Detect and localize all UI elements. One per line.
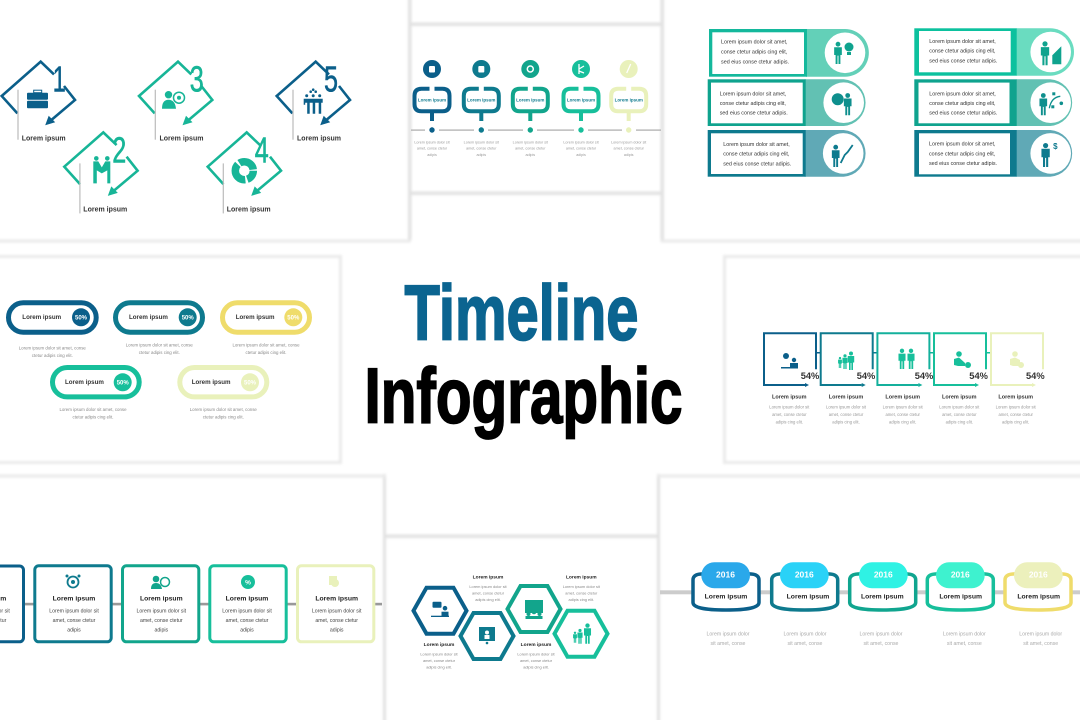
card left 2: conse ctetur adipis cing elit,	[720, 101, 786, 107]
year item 3: Lorem ipsum dolor	[860, 632, 903, 638]
timeline step 3: Lorem ipsum	[516, 98, 544, 102]
step 2: 54%	[857, 371, 876, 381]
hexagon text top right: Lorem ipsum dolor sit	[563, 584, 601, 589]
card 2: amet, conse ctetur	[53, 618, 96, 624]
step 5: amet, conse ctetur	[998, 412, 1034, 417]
title line: Timeline: Timeline	[404, 268, 638, 356]
pill 2: 50%	[182, 316, 194, 322]
panel: numbered diamonds	[2, 59, 350, 213]
icon: person with bulb	[834, 42, 854, 64]
icon: group of people	[304, 88, 323, 114]
timeline step 2: amet, conse ctetur	[466, 146, 497, 150]
year item 5: Lorem ipsum dolor	[1019, 632, 1062, 638]
pill 4	[52, 368, 139, 419]
card 3	[122, 566, 199, 642]
card left 3: conse ctetur adipis cing elit,	[723, 152, 790, 158]
pill 1: 50%	[75, 316, 88, 322]
timeline step 4: Lorem ipsum dolor sit	[563, 140, 599, 144]
hexagon text bottom left: adipis cing elit.	[426, 664, 452, 670]
pill 4: 50%	[117, 380, 129, 386]
card 1	[0, 566, 24, 642]
diamond item 4: Lorem ipsum	[227, 206, 271, 213]
diamond item 3: Lorem ipsum	[160, 136, 203, 143]
pill 1: Lorem ipsum	[22, 314, 62, 321]
icon: speaker at desk	[431, 602, 449, 617]
pill 4: Lorem ipsum	[65, 379, 104, 386]
card left 2: Lorem ipsum dolor sit amet,	[720, 91, 787, 97]
icon: two people	[898, 349, 915, 369]
diamond item 4	[208, 129, 281, 213]
icon: pale document	[329, 576, 339, 587]
icon: person with arrow up	[1041, 41, 1061, 65]
pill 2	[116, 303, 202, 355]
timeline step 3: Lorem ipsum dolor sit	[513, 140, 548, 144]
card left 3	[708, 130, 866, 177]
card right 1: conse ctetur adipis cing elit,	[929, 49, 996, 55]
hexagon text bottom left: Lorem ipsum dolor sit	[420, 651, 459, 656]
pill 3: Lorem ipsum	[236, 314, 275, 321]
card 5: Lorem ipsum	[315, 596, 358, 603]
pill 1: Lorem ipsum dolor sit amet, conse	[19, 346, 86, 350]
hexagon text top right: Lorem ipsum	[566, 574, 597, 580]
timeline step 4: Lorem ipsum	[567, 98, 595, 102]
icon: person with target	[151, 576, 170, 589]
card 3: Lorem ipsum	[140, 596, 183, 603]
year item 4: 2016	[951, 570, 970, 580]
panel: year timeline	[660, 562, 1080, 647]
hexagon text top left	[469, 574, 508, 602]
pill 2: Lorem ipsum	[129, 314, 168, 321]
pill 5: Lorem ipsum	[192, 379, 231, 386]
pill 3: 50%	[287, 316, 300, 322]
timeline step 2: Lorem ipsum	[467, 98, 495, 102]
card left 1: sed eius conse ctetur adipis.	[721, 59, 789, 65]
step 4	[934, 333, 991, 425]
year item 5: Lorem ipsum	[1017, 593, 1060, 600]
card 3: Lorem ipsum dolor sit	[137, 609, 187, 615]
card right 3: conse ctetur adipis cing elit,	[929, 151, 996, 157]
hexagon text bottom left: amet, conse ctetur	[423, 658, 456, 663]
hexagon text top right: adipis cing elit.	[569, 597, 594, 602]
panel: rounded card timeline	[0, 566, 382, 642]
diamond item 3	[139, 59, 212, 143]
timeline step 1: adipis	[427, 153, 437, 157]
step 4: Lorem ipsum dolor sit	[939, 404, 980, 410]
timeline step 5: amet, conse ctetur	[614, 146, 645, 150]
icon: person with rising arrow	[832, 145, 853, 167]
year item 4: Lorem ipsum dolor	[943, 632, 986, 638]
hexagon text top right: amet, conse ctetur	[565, 590, 598, 595]
timeline step 3: amet, conse ctetur	[515, 146, 546, 150]
year item 1: Lorem ipsum dolor	[707, 632, 750, 638]
card left 1: Lorem ipsum dolor sit amet,	[721, 40, 788, 46]
year item 5	[1005, 562, 1071, 647]
diamond item 2	[64, 129, 138, 213]
diamond item 5	[277, 59, 350, 143]
card right 1	[914, 28, 1074, 76]
timeline step 3	[513, 60, 548, 157]
timeline step 2: adipis	[476, 153, 486, 157]
diamond item 2: Lorem ipsum	[83, 206, 127, 213]
step 3: adipis cing elit.	[889, 420, 916, 425]
step 4: 54%	[969, 371, 989, 381]
card 5: amet, conse ctetur	[315, 618, 358, 624]
icon: idea presenter	[781, 353, 798, 368]
timeline step 4	[563, 60, 599, 157]
card right 2: conse ctetur adipis cing elit,	[929, 101, 996, 107]
card right 3	[914, 130, 1072, 177]
card 2: Lorem ipsum	[53, 596, 95, 603]
timeline step 1	[414, 60, 450, 157]
hexagon 4	[554, 611, 608, 657]
hexagon text bottom right	[517, 642, 556, 670]
year item 2: Lorem ipsum dolor	[784, 632, 827, 638]
card left 3: Lorem ipsum dolor sit amet,	[723, 142, 790, 148]
icon: person with strategy	[1039, 92, 1063, 115]
step 1: Lorem ipsum dolor sit	[769, 404, 810, 410]
hexagon text bottom left	[420, 642, 459, 670]
pill 3	[222, 303, 310, 355]
pill 2: ctetur adipis cing elit.	[139, 350, 180, 355]
pill 2: Lorem ipsum dolor sit amet, conse	[126, 342, 193, 348]
pill 5: Lorem ipsum dolor sit amet, conse	[190, 407, 257, 412]
step 2: amet, conse ctetur	[829, 412, 864, 417]
title line: Infographic: Infographic	[364, 352, 682, 440]
timeline step 1: Lorem ipsum	[418, 98, 446, 102]
hexagon text top left: Lorem ipsum dolor sit	[469, 584, 508, 589]
step 4: amet, conse ctetur	[942, 412, 977, 417]
timeline step 2: Lorem ipsum dolor sit	[464, 140, 499, 144]
step 5: 54%	[1026, 371, 1045, 381]
card 5	[298, 566, 374, 642]
title	[364, 268, 682, 440]
year item 4: sit amet, conse	[947, 641, 982, 647]
step 5: Lorem ipsum dolor sit	[996, 404, 1037, 410]
timeline step 5: Lorem ipsum dolor sit	[611, 140, 646, 144]
year item 2: sit amet, conse	[788, 641, 823, 647]
card right 1: Lorem ipsum dolor sit amet,	[929, 39, 996, 45]
card right 2: sed eius conse ctetur adipis.	[929, 111, 997, 117]
icon: rising people	[838, 352, 854, 370]
step 2: Lorem ipsum dolor sit	[826, 404, 867, 410]
card 2: adipis	[67, 627, 81, 633]
timeline step 5	[611, 60, 646, 157]
year item 3: sit amet, conse	[864, 641, 899, 647]
year item 3	[850, 562, 916, 647]
pill 5	[180, 368, 267, 419]
hexagon text bottom right: adipis cing elit.	[523, 664, 549, 670]
card left 1	[709, 29, 869, 77]
panel: text cards with icon circles	[708, 28, 1074, 177]
card 2: Lorem ipsum dolor sit	[49, 609, 99, 615]
step 5	[991, 333, 1045, 425]
timeline step 5: Lorem ipsum	[615, 98, 643, 102]
card 4: Lorem ipsum	[226, 596, 268, 603]
step 5: Lorem ipsum	[998, 394, 1033, 400]
timeline step 1: amet, conse ctetur	[417, 146, 448, 150]
pill 3: ctetur adipis cing elit.	[246, 350, 286, 355]
step 5: adipis cing elit.	[1002, 420, 1029, 425]
year item 1: 2016	[716, 570, 735, 580]
year item 2	[772, 562, 838, 647]
diamond item 5: Lorem ipsum	[297, 136, 341, 143]
step 1	[764, 333, 821, 425]
icon: target person	[162, 91, 184, 109]
panel: connector timeline	[411, 60, 661, 157]
step 3	[877, 333, 934, 425]
card left 1: conse ctetur adipis cing elit,	[721, 49, 788, 55]
diamond item 1: 1	[53, 59, 66, 100]
timeline step 3: adipis	[525, 153, 535, 157]
card right 3: Lorem ipsum dolor sit amet,	[929, 142, 996, 148]
pill 5: 50%	[244, 380, 257, 386]
icon: briefcase	[27, 90, 48, 108]
card 4: amet, conse ctetur	[226, 618, 269, 624]
year item 1: sit amet, conse	[711, 641, 746, 647]
icon: rising people	[573, 623, 591, 644]
pill 4: ctetur adipis cing elit.	[72, 414, 114, 419]
step 3: Lorem ipsum dolor sit	[883, 404, 924, 410]
pill 1	[8, 303, 96, 358]
card right 3: sed eius conse ctetur adipis.	[929, 161, 997, 167]
year item 3: Lorem ipsum	[861, 593, 904, 600]
pill 4: Lorem ipsum dolor sit amet, conse	[59, 407, 127, 412]
diamond item 3: 3	[190, 59, 204, 100]
step 4: adipis cing elit.	[946, 420, 973, 425]
hexagon text top left: amet, conse ctetur	[472, 590, 505, 595]
card left 3: sed eius conse ctetur adipis.	[723, 161, 791, 167]
year item 5: sit amet, conse	[1023, 641, 1058, 647]
icon: presentation board	[479, 627, 495, 644]
card right 2	[914, 79, 1072, 126]
timeline step 5: adipis	[624, 153, 634, 157]
diamond item 1: Lorem ipsum	[22, 136, 66, 143]
diamond item 2: 2	[112, 129, 126, 170]
timeline step 4: amet, conse ctetur	[566, 146, 597, 150]
hexagon text bottom right: Lorem ipsum dolor sit	[517, 651, 556, 656]
diamond item 4: 4	[255, 129, 269, 170]
diamond item 1	[2, 59, 75, 143]
card right 2: Lorem ipsum dolor sit amet,	[929, 91, 996, 97]
icon: percent bubble: %	[245, 580, 251, 586]
step 3: amet, conse ctetur	[885, 412, 921, 417]
step 4: Lorem ipsum	[942, 394, 977, 400]
step 1: adipis cing elit.	[776, 420, 803, 425]
pill 5: ctetur adipis cing elit.	[203, 414, 244, 419]
panel: percentage pills	[8, 303, 310, 419]
icon: person with puzzle	[954, 351, 971, 368]
timeline step 1: Lorem ipsum dolor sit	[414, 140, 450, 144]
hexagon text bottom left: Lorem ipsum	[424, 642, 455, 648]
hexagon 1	[414, 588, 466, 634]
icon: person with pie	[832, 93, 852, 115]
icon: class board	[525, 600, 543, 619]
card 4: adipis	[240, 627, 254, 633]
card 5: adipis	[330, 627, 344, 633]
icon: person with coin	[1010, 351, 1024, 368]
icon: alarm person	[66, 574, 80, 588]
timeline step 4: adipis	[576, 153, 586, 157]
step 1: amet, conse ctetur	[772, 412, 807, 417]
year item 3: 2016	[874, 570, 893, 580]
hexagon 2	[460, 613, 514, 659]
panel: square percentage steps	[764, 333, 1045, 425]
panel: hexagons	[414, 574, 608, 670]
year item 4	[927, 562, 993, 647]
card 3: amet, conse ctetur	[140, 618, 183, 624]
card right 1: sed eius conse ctetur adipis.	[929, 58, 997, 64]
hexagon text bottom right: amet, conse ctetur	[520, 658, 553, 663]
icon: person with dollar: $	[1053, 142, 1058, 151]
year item 1: Lorem ipsum	[705, 593, 747, 600]
icon: person with dollar	[1041, 142, 1058, 167]
card left 2: sed eius conse ctetur adipis.	[720, 111, 788, 117]
step 1: Lorem ipsum	[772, 394, 807, 400]
hexagon 3	[508, 586, 560, 632]
hexagon text top right	[563, 574, 601, 602]
year item 2: Lorem ipsum	[787, 593, 829, 600]
year item 1	[693, 562, 759, 647]
hexagon text top left: adipis cing elit.	[475, 597, 501, 602]
card 4	[210, 566, 286, 642]
card 4: Lorem ipsum dolor sit	[222, 609, 272, 615]
step 3: Lorem ipsum	[885, 394, 920, 400]
step 2: adipis cing elit.	[832, 420, 860, 425]
card 3: adipis	[155, 627, 168, 633]
year item 2: 2016	[795, 570, 814, 580]
pill 3: Lorem ipsum dolor sit amet, conse	[232, 342, 300, 348]
icon: donut chart	[235, 162, 253, 180]
timeline step 2	[464, 60, 499, 157]
hexagon text bottom right: Lorem ipsum	[521, 642, 552, 648]
icon: handshake	[93, 156, 110, 183]
card left 2	[708, 79, 866, 126]
card 5: Lorem ipsum dolor sit	[312, 609, 362, 615]
step 3: 54%	[915, 371, 934, 381]
step 2: Lorem ipsum	[829, 394, 863, 400]
hexagon text top left: Lorem ipsum	[473, 574, 504, 580]
diamond item 5: 5	[324, 59, 338, 100]
year item 4: Lorem ipsum	[939, 593, 982, 600]
step 1: 54%	[801, 371, 820, 381]
year item 5: 2016	[1029, 570, 1048, 580]
pill 1: ctetur adipis cing elit.	[32, 353, 73, 358]
card 2	[35, 566, 111, 642]
step 2	[821, 333, 878, 425]
